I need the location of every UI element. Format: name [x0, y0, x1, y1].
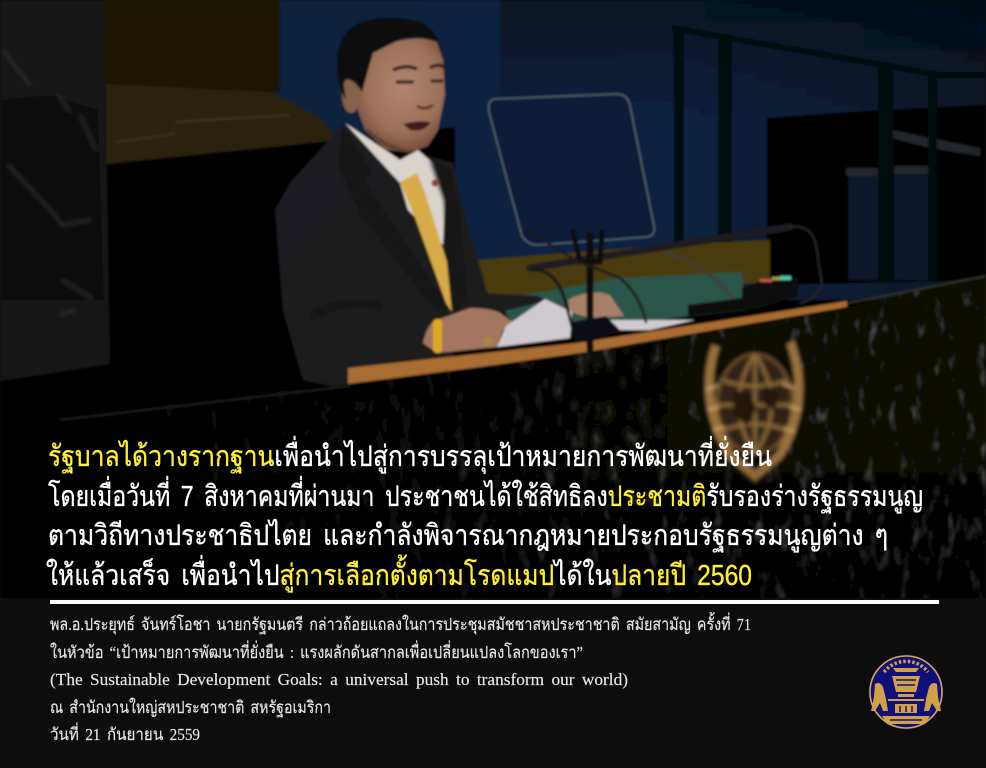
caption text: วันที่ 21 กันยายน 2559 [50, 722, 200, 744]
lapels [313, 125, 464, 317]
UN emblem [706, 342, 802, 476]
hair [337, 18, 443, 100]
dark structure on the right [767, 68, 986, 285]
caption text [50, 612, 751, 744]
caption text: พล.อ.ประยุทธ์ จันทร์โอชา นายกรัฐมนตรี กล่าวถ้อยแถลงในการประชุมสมัชชาสหประชาชาติ สมัยสามัญ ครั้งที่ 71 [50, 612, 751, 635]
neck and face [352, 39, 445, 152]
olive wall block [104, 0, 340, 164]
hand and wristband [423, 308, 517, 353]
microphones and stands [530, 227, 822, 350]
divider rule [50, 600, 939, 604]
microphone base and lights [572, 276, 798, 342]
shirt collar [345, 123, 445, 245]
glass teleprompter [489, 94, 654, 245]
icon: government seal [868, 654, 944, 730]
marble pillar [0, 0, 110, 381]
marble podium front [0, 270, 986, 600]
headline text: ให้แล้วเสร็จ เพื่อนำไปสู่การเลือกตั้งตามโรดแมปได้ในปลายปี 2560 [46, 554, 752, 593]
papers [497, 299, 695, 347]
lapel pin [432, 180, 438, 186]
ear [342, 77, 360, 113]
caption text: ในหัวข้อ “เป้าหมายการพัฒนาที่ยั่งยืน : แรงผลักดันสากลเพื่อเปลี่ยนแปลงโลกของเรา” [50, 640, 583, 662]
suit [275, 125, 570, 390]
wood podium edge [348, 301, 847, 384]
green floor [497, 272, 745, 335]
headline text [46, 436, 923, 593]
bottom caption panel [0, 598, 986, 768]
blue wall [270, 0, 986, 300]
far hand [568, 292, 624, 318]
tie [400, 173, 452, 312]
headline text: โดยเมื่อวันที่ 7 สิงหาคมที่ผ่านมา ประชาชนได้ใช้สิทธิลงประชามติรับรองร่างรัฐธรรมนูญ [48, 476, 923, 514]
caption text: (The Sustainable Development Goals: a universal push to transform our world) [50, 670, 628, 689]
black box behind speaker [106, 127, 455, 440]
gold wall strip [478, 240, 770, 300]
caption text: ณ สำนักงานใหญ่สหประชาชาติ สหรัฐอเมริกา [50, 697, 331, 718]
background gallery rails and posts [672, 25, 986, 245]
headline text: รัฐบาลได้วางรากฐานเพื่อนำไปสู่การบรรลุเป้าหมายการพัฒนาที่ยั่งยืน [48, 436, 772, 474]
speaker [275, 18, 570, 390]
photo: prime minister speaking at the UN podium [0, 0, 986, 600]
